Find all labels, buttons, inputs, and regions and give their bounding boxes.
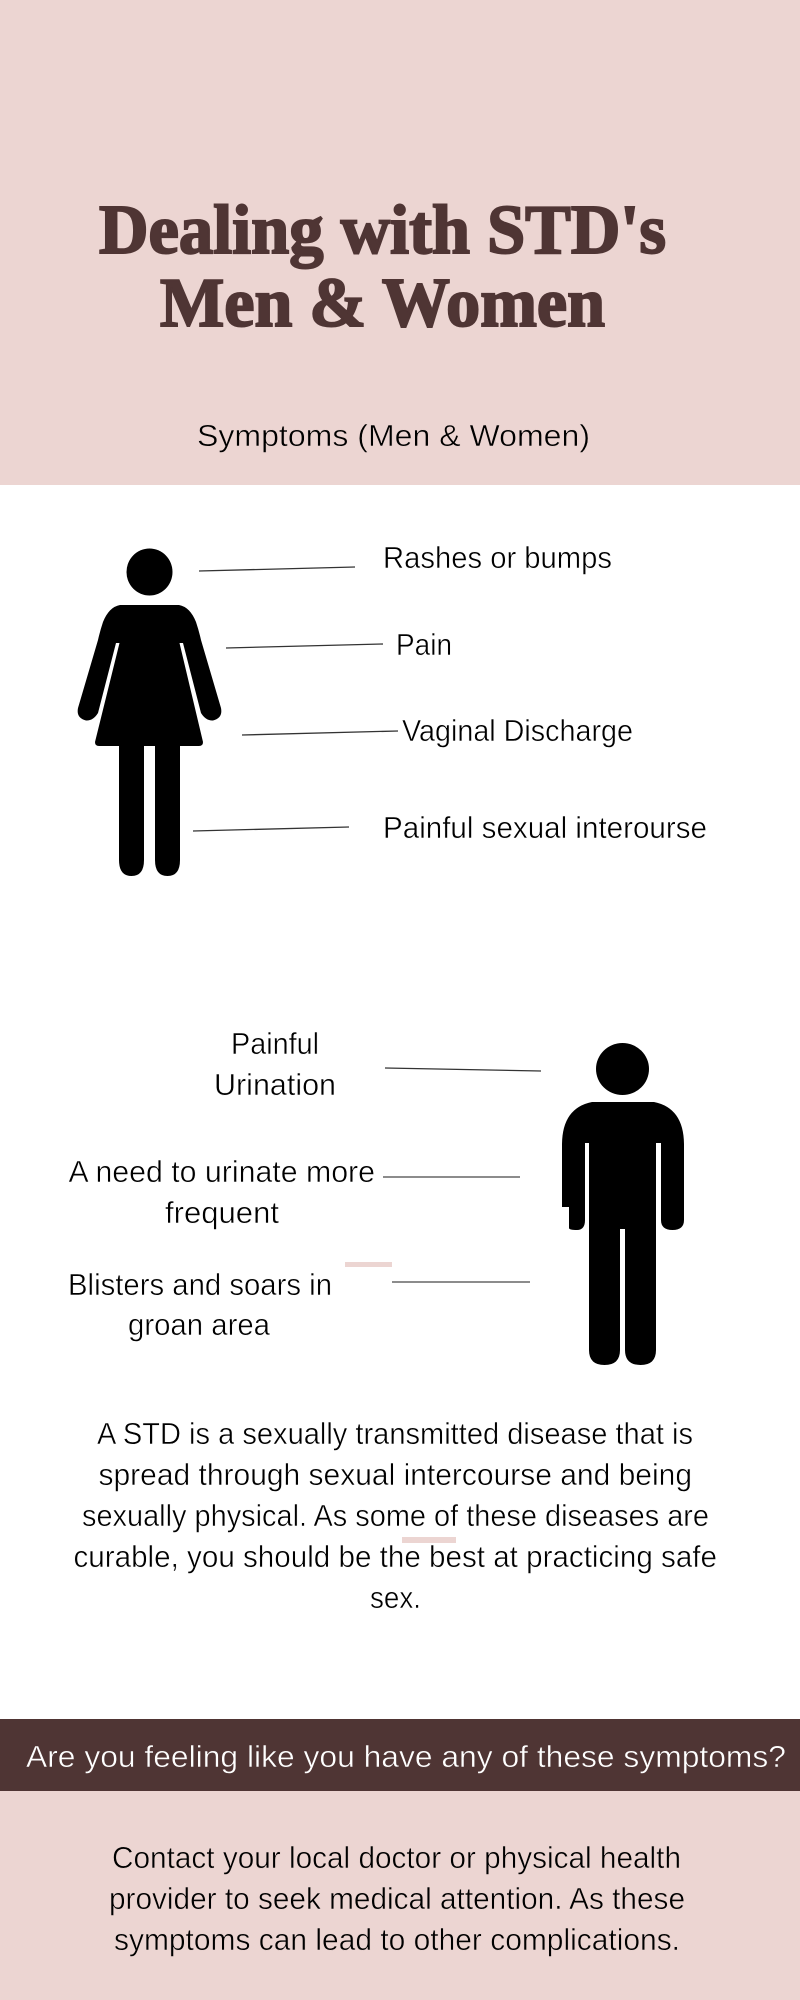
panel: contact advice (0, 1791, 800, 2000)
callout: rashes or bumps: Rashes or bumps (383, 540, 612, 575)
callout: rashes or bumps (199, 540, 612, 575)
callout: painful urination: Urination (214, 1067, 336, 1102)
text block: STD definition: sexually physical. As some of these diseases are (82, 1498, 709, 1533)
callout: need to urinate more frequent: frequent (165, 1195, 279, 1230)
callout: painful sexual intercourse (193, 810, 707, 845)
callout: painful sexual intercourse: Painful sexual interourse (383, 810, 707, 845)
callout: pain (226, 627, 452, 662)
text block: STD definition: curable, you should be the best at practicing safe (74, 1539, 717, 1574)
callout: need to urinate more frequent: A need to urinate more (68, 1154, 375, 1189)
icon: male figure (562, 1043, 684, 1365)
icon: female figure (78, 548, 221, 876)
callout: pain: Pain (396, 627, 452, 662)
panel: contact advice: Contact your local doctor or physical health (112, 1840, 681, 1875)
callout: blisters and soars: groan area (128, 1307, 271, 1342)
text block: STD definition: sex. (370, 1580, 421, 1615)
callout: blisters and soars: Blisters and soars in (68, 1267, 332, 1302)
banner: question (0, 1719, 800, 1791)
panel: contact advice: provider to seek medical attention. As these (109, 1881, 685, 1916)
callout: vaginal discharge: Vaginal Discharge (402, 713, 633, 748)
title: Men & Women (160, 265, 605, 342)
callout: need to urinate more frequent (68, 1154, 520, 1230)
title (99, 192, 666, 342)
panel: header (0, 0, 800, 485)
text block: STD definition (74, 1416, 717, 1615)
callout: painful urination (214, 1026, 541, 1102)
callout: blisters and soars (68, 1262, 530, 1342)
callout: vaginal discharge (242, 713, 633, 748)
callout: painful urination: Painful (231, 1026, 319, 1061)
panel: men's symptoms (68, 1026, 684, 1365)
panel: contact advice: symptoms can lead to other complications. (114, 1922, 680, 1957)
subtitle: Symptoms (Men & Women) (197, 418, 590, 453)
text block: STD definition: spread through sexual intercourse and being (98, 1457, 692, 1492)
title: Dealing with STD's (99, 192, 666, 269)
banner: question: Are you feeling like you have any of these symptoms? (26, 1739, 786, 1774)
text block: STD definition: A STD is a sexually transmitted disease that is (97, 1416, 693, 1451)
panel: women's symptoms (78, 540, 707, 876)
